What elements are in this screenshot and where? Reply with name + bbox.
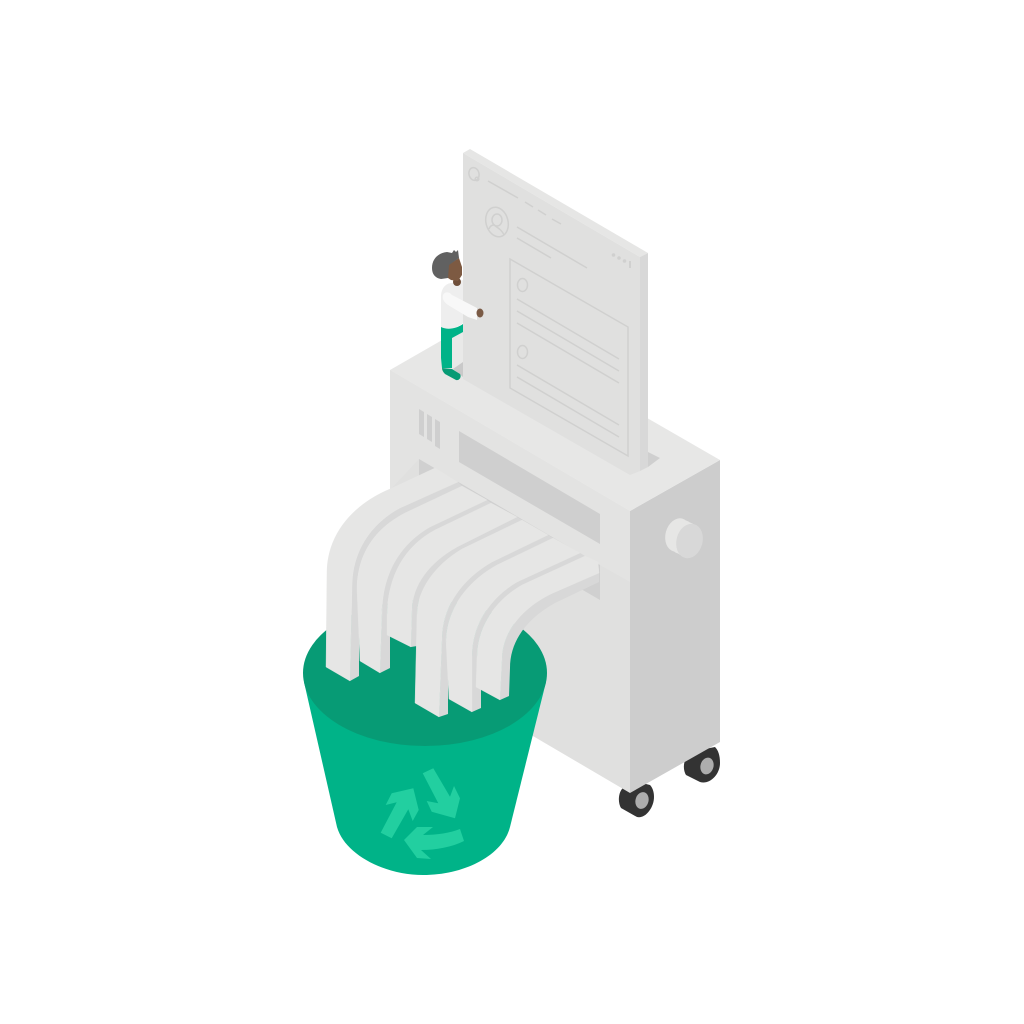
paper slot shadow	[648, 452, 660, 467]
document sheet	[463, 149, 648, 475]
machine front face	[390, 370, 630, 793]
strip 3	[387, 503, 522, 647]
bin interior	[303, 600, 547, 746]
strip 4	[415, 520, 553, 717]
person arm	[443, 292, 477, 320]
strip 6	[476, 556, 599, 700]
person hand	[476, 308, 484, 318]
person hair	[432, 250, 459, 279]
avatar	[482, 205, 512, 239]
recycle arrow: right	[423, 768, 460, 818]
sheet printed content	[467, 166, 628, 456]
person back leg and shadow	[452, 332, 463, 377]
recycling bin	[303, 600, 547, 875]
recycling symbol	[381, 768, 464, 859]
machine top face	[390, 320, 720, 511]
shredder machine	[390, 320, 720, 817]
sheet top edge	[463, 149, 648, 257]
shredded paper strips	[326, 468, 599, 717]
strip 1	[326, 468, 462, 681]
content card	[510, 259, 628, 456]
person torso	[441, 280, 463, 329]
person head	[448, 258, 462, 281]
recycle arrow: bottom	[404, 827, 464, 859]
card item markers	[518, 278, 528, 292]
front control panel	[390, 370, 630, 582]
knob	[662, 515, 707, 561]
vent bars	[419, 409, 440, 449]
logo	[467, 166, 481, 182]
person trousers	[441, 324, 463, 368]
person	[432, 250, 484, 380]
bin body	[304, 682, 546, 875]
card text lines	[517, 299, 619, 437]
header line and menu	[488, 181, 561, 224]
wheel: front	[619, 780, 654, 817]
sheet face	[463, 153, 640, 475]
profile text lines	[517, 227, 587, 268]
display window	[459, 431, 600, 544]
strip 5	[446, 538, 585, 712]
window dots	[612, 253, 631, 268]
recycle arrow: left	[381, 788, 419, 838]
person neck	[453, 278, 461, 286]
output slot	[419, 459, 600, 600]
strip 2	[357, 486, 491, 673]
person foot	[442, 368, 461, 380]
machine right face	[630, 460, 720, 793]
sheet side edge	[640, 253, 648, 471]
wheel: rear	[684, 747, 720, 783]
